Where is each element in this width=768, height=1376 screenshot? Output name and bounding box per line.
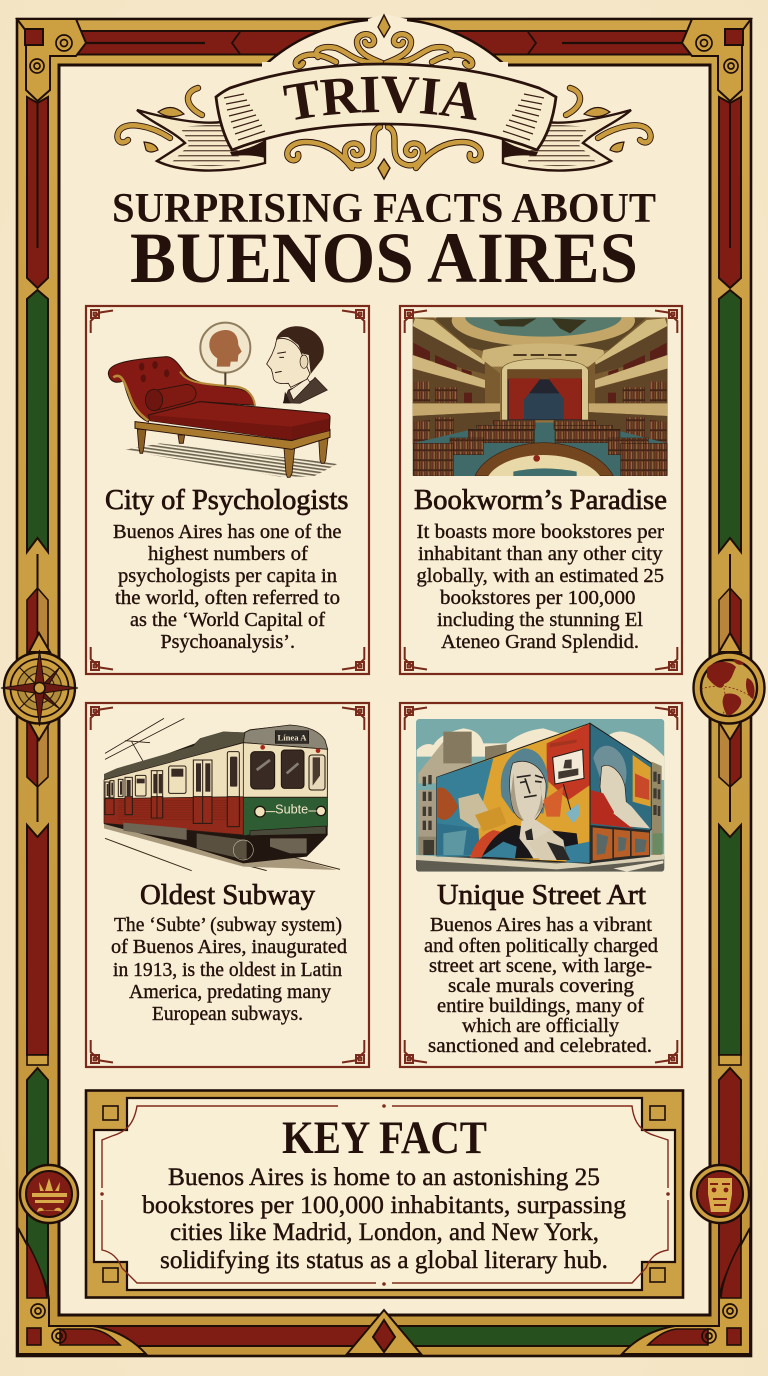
text: street art description <box>424 914 658 1057</box>
text: subway description: The ‘Subte’ (subway system) <box>114 914 342 936</box>
panel: City of Psychologists <box>86 306 369 674</box>
heading: Bookworm's Paradise: Bookworm’s Paradise <box>414 485 667 516</box>
text: psychologists description: highest numbers of <box>148 543 308 565</box>
text: bookstores description: globally, with an estimated 25 <box>416 565 664 587</box>
heading: Key Fact: KEY FACT <box>282 1112 487 1164</box>
heading: Surprising Facts About Buenos Aires: BUENOS AIRES <box>130 218 638 298</box>
text: psychologists description: as the ‘World Capital of <box>130 609 325 631</box>
text: bookstores description <box>416 521 664 653</box>
heading: Unique Street Art: Unique Street Art <box>437 880 646 911</box>
text: street art description: Buenos Aires has a vibrant <box>430 914 652 936</box>
text: subway description <box>111 914 347 1025</box>
heading: Oldest Subway: Oldest Subway <box>140 880 316 911</box>
text: street art description: sanctioned and celebrated. <box>428 1035 652 1057</box>
text: bookstores description: Ateneo Grand Splendid. <box>441 631 639 653</box>
illustration: Subte train Línea A <box>104 718 340 871</box>
illustration: building-size political mural <box>416 719 664 872</box>
panel: Bookworm's Paradise <box>400 290 682 674</box>
banner ribbon with ornaments <box>114 14 654 180</box>
text: bookstores description: inhabitant than any other city <box>418 543 663 565</box>
text: street art description: scale murals covering <box>448 975 634 997</box>
panel: Oldest Subway <box>86 703 369 1067</box>
icon: compass rose medallion <box>1 650 78 726</box>
illustration: Subte train Línea A: Línea A <box>277 732 307 742</box>
text: subway description: in 1913, is the oldest in Latin <box>113 959 342 981</box>
text: psychologists description: the world, often referred to <box>115 587 340 609</box>
text: street art description: which are officially <box>462 1015 620 1037</box>
bottom centre diamond ornament <box>347 1310 421 1354</box>
icon: right tiki mask medallion <box>691 1165 749 1223</box>
text: key fact body: bookstores per 100,000 inhabitants, surpassing <box>142 1190 626 1219</box>
text: subway description: America, predating many <box>129 981 332 1003</box>
text: key fact body: Buenos Aires is home to an astonishing 25 <box>168 1162 600 1191</box>
text: bookstores description: including the stunning El <box>437 609 643 631</box>
text: bookstores description: bookstores per 100,000 <box>440 587 636 609</box>
text: street art description: and often politically charged <box>424 935 658 957</box>
title: Trivia: TRIVIA <box>282 76 476 120</box>
panel: Unique Street Art <box>400 703 682 1067</box>
illustration: El Ateneo Grand Splendid theatre bookstore <box>412 317 668 476</box>
triangles flanking medallions <box>29 633 741 740</box>
text: subway description: of Buenos Aires, inaugurated <box>111 936 347 958</box>
text: key fact body: cities like Madrid, London, and New York, <box>170 1217 599 1246</box>
text: bookstores description: It boasts more bookstores per <box>416 521 664 543</box>
callout: Key Fact <box>86 1090 683 1298</box>
icon: globe medallion <box>694 652 764 724</box>
text: key fact body: solidifying its status as a global literary hub. <box>160 1245 608 1274</box>
illustration: Subte train Línea A: Subte <box>275 802 308 816</box>
text: psychologists description: Psychoanalysis’. <box>160 631 295 653</box>
text: key fact body <box>142 1162 626 1274</box>
heading: City of Psychologists: City of Psychologists <box>105 485 348 516</box>
text: subway description: European subways. <box>152 1003 303 1025</box>
text: psychologists description <box>113 521 342 653</box>
text: psychologists description: psychologists per capita in <box>118 565 337 587</box>
heading: Surprising Facts About Buenos Aires <box>112 186 656 298</box>
text: psychologists description: Buenos Aires has one of the <box>113 521 342 543</box>
icon: left crown medallion <box>20 1165 78 1223</box>
heading: Surprising Facts About Buenos Aires: SURPRISING FACTS ABOUT <box>112 186 656 232</box>
illustration: red chaise longue, magnifier with head, and man's profile <box>108 323 338 477</box>
text: street art description: entire buildings, many of <box>437 995 644 1017</box>
text: street art description: street art scene, with large- <box>429 955 652 977</box>
